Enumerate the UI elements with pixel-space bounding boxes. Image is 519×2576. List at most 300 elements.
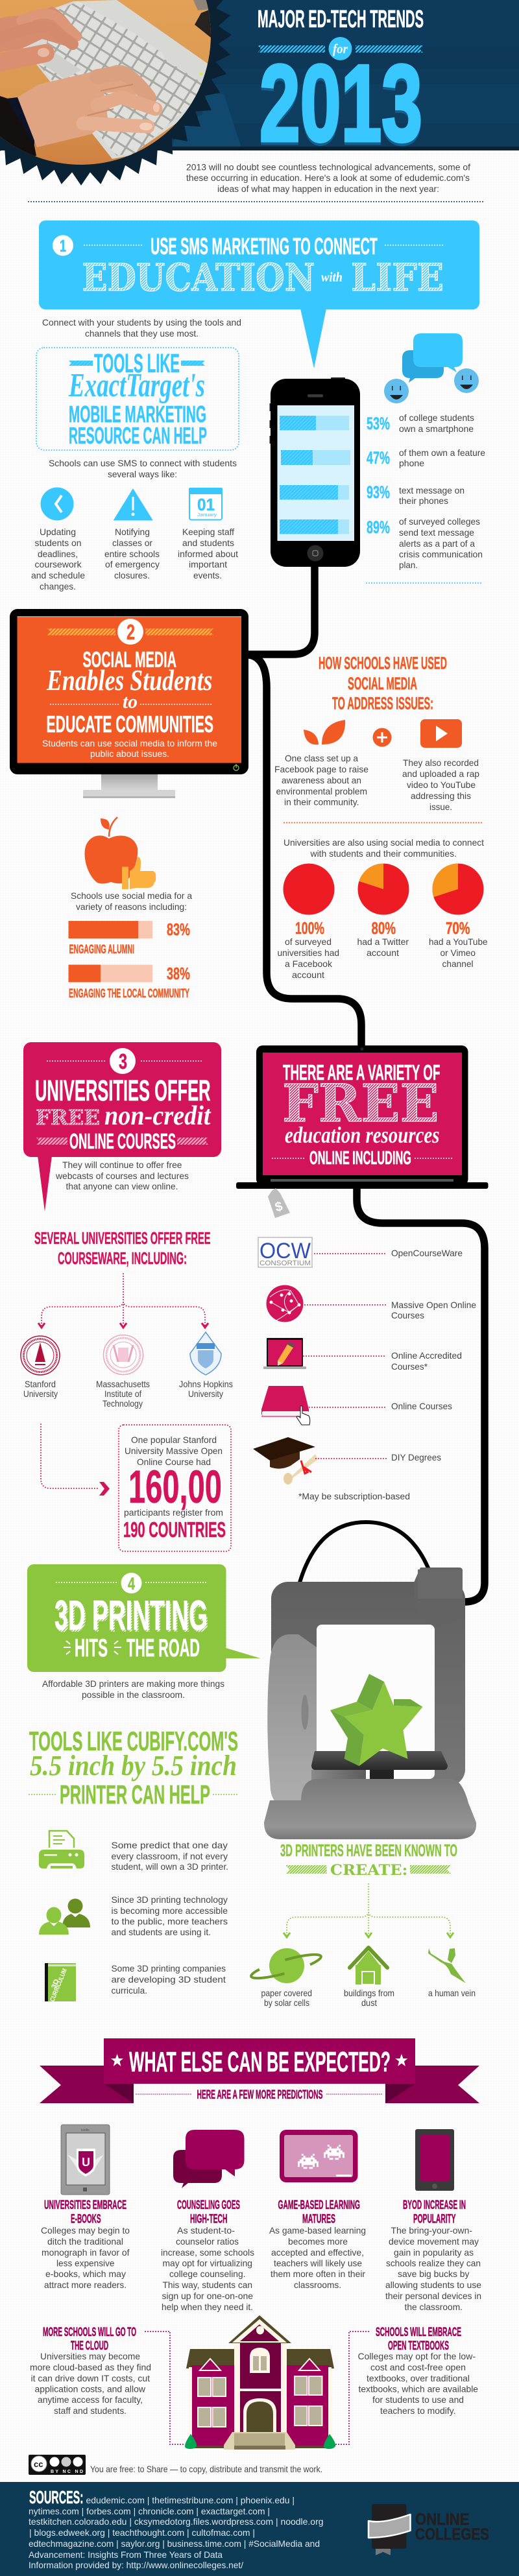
stats: phone usage: send text message	[399, 527, 474, 538]
prediction: e-books: UNIVERSITIES EMBRACE	[44, 2199, 127, 2212]
text: free webcasts: webcasts of courses and lectures	[55, 1171, 189, 1181]
icon: desktop monitor with heading	[10, 609, 248, 798]
icon: laptop with heading: education resources	[285, 1122, 440, 1148]
item: 3D curricula: Some 3D printing companies	[112, 1963, 226, 1974]
pie chart: 80 percent twitter: 80%	[371, 918, 396, 938]
stats: phone usage: 53%	[367, 414, 390, 433]
prediction: open textbooks: Colleges may opt for the low-	[358, 2351, 476, 2361]
panel: trend 2 social media	[10, 609, 488, 1001]
heading: 2013	[260, 42, 422, 167]
panel: trend 3 free online courses	[21, 1042, 488, 1551]
heading: 3D printers create	[280, 1841, 457, 1879]
item: human vein: a human vein	[428, 1988, 476, 1998]
prediction: counseling: help when they need it.	[162, 2302, 253, 2312]
prediction: BYOD: allowing students to use	[385, 2280, 481, 2290]
illustration: 3D printer with star	[264, 1522, 476, 1839]
speech bubble header: 3	[119, 1049, 127, 1073]
prediction: BYOD: the classroom.	[405, 2302, 463, 2312]
heading: 2013: 2013	[260, 42, 422, 164]
prediction: game-based learning: teachers will likely use	[274, 2258, 362, 2269]
text: sources list: nytimes.com | forbes.com | chronicle.com | exacttarget.com |	[29, 2506, 270, 2516]
speech bubble header: HITS	[75, 1634, 108, 1662]
icon: laptop with heading	[236, 1045, 488, 1189]
stats: phone usage: own a smartphone	[399, 423, 474, 434]
heading: how schools used social media: SOCIAL MEDIA	[348, 674, 417, 693]
text: sources list: edudemic.com | thetimestribune.com | phoenix.edu |	[86, 2495, 295, 2505]
icon: desktop monitor with heading: Students can use social media to inform the	[42, 738, 217, 748]
upper hand	[0, 6, 71, 52]
banner heading: HERE ARE A FEW MORE PREDICTIONS	[197, 2088, 323, 2102]
speech bubble header: THE ROAD	[127, 1634, 200, 1662]
icon: two people	[39, 1899, 90, 1935]
heading: how schools used social media: TO ADDRESS ISSUES:	[332, 694, 433, 713]
item: building from dust: dust	[361, 1998, 377, 2008]
pie chart: 70 percent youtube: or Vimeo	[440, 948, 476, 958]
text: universities connect: with students and their communities.	[310, 848, 457, 859]
item: 3D printer in every classroom: student, will own a 3D printer.	[112, 1861, 228, 1872]
prediction: BYOD: The bring-your-own-	[391, 2225, 472, 2236]
license: creative commons: cc	[34, 2459, 43, 2469]
prediction: counseling: COUNSELING GOES	[177, 2199, 240, 2212]
bar: engaging alumni 83 percent: 83%	[167, 920, 190, 939]
icon: desktop monitor with heading: 2	[127, 620, 135, 644]
prediction: open textbooks: for students to use and	[372, 2394, 464, 2405]
prediction: open textbooks: OPEN TEXTBOOKS	[388, 2339, 449, 2353]
icon: laptop and pencil	[263, 1338, 306, 1369]
item: updating students: and schedule	[31, 570, 85, 580]
callout: 160,00 participants	[119, 1425, 231, 1551]
text: sources list: edtechmagazine.com | saylor.org | business.time.com | #SocialMedia and	[29, 2538, 320, 2549]
text: introduction: ideas of what may happen in education in the next year:	[217, 184, 439, 194]
icon: curriculum book	[45, 1963, 76, 2003]
pie chart: 70 percent youtube	[429, 864, 488, 969]
text: facebook page example	[274, 753, 368, 807]
item: solar paper planet: by solar cells	[264, 1998, 309, 2008]
speech bubble header	[39, 221, 479, 368]
item: 3D curricula: are developing 3D student	[112, 1974, 226, 1985]
prediction: game-based learning: As game-based learning	[269, 2225, 366, 2236]
prediction: BYOD: gain in popularity as	[394, 2247, 474, 2258]
prediction: game-based learning	[269, 2130, 366, 2290]
pie chart: 70 percent youtube: had a YouTube	[429, 936, 488, 947]
callout: 160,00 participants: 160,00	[128, 1462, 222, 1513]
pie chart: 100 percent facebook: of surveyed	[285, 936, 332, 947]
speech bubble header: LIFE	[351, 256, 444, 300]
prediction: the cloud: anytime access for faculty,	[38, 2394, 143, 2405]
icon: laptop with heading: FREE	[282, 1073, 439, 1134]
university: MIT: Massachusetts	[96, 1379, 150, 1389]
text: schools use social media: variety of reasons including:	[76, 901, 187, 912]
icon: plus	[372, 728, 392, 747]
item: online courses	[261, 1386, 452, 1425]
icon: laptop with heading: ONLINE INCLUDING	[309, 1148, 411, 1169]
license: creative commons: You are free: to Share — to copy, distribute and transmit the work.	[90, 2464, 322, 2474]
text: free webcasts: They will continue to offer free	[62, 1160, 182, 1170]
text: connect with students: Connect with your students by using the tools and	[42, 317, 241, 328]
pie chart: 80 percent twitter: had a Twitter	[357, 936, 409, 947]
speech bubble header: ONLINE COURSES	[69, 1129, 176, 1153]
text: facebook page example: One class set up a	[285, 753, 358, 763]
pie chart: 100 percent facebook: universities had	[278, 948, 339, 958]
logo: online colleges: COLLEGES	[415, 2525, 489, 2544]
text: schools can use SMS: several ways like:	[108, 469, 177, 479]
prediction: e-books: less expensive	[56, 2258, 115, 2269]
text: sources list: SOURCES:	[29, 2487, 83, 2507]
callout: ExactTarget tools	[36, 348, 239, 450]
stats: phone usage: text message on	[399, 485, 465, 495]
text: facebook page example: awareness about an	[282, 775, 361, 785]
prediction: game-based learning: becomes more	[288, 2236, 348, 2247]
logo: online colleges	[368, 2504, 489, 2555]
university: MIT: Institute of	[104, 1389, 141, 1399]
logo: online colleges: ONLINE	[415, 2510, 470, 2529]
panel: trend 1 SMS marketing	[31, 221, 485, 591]
callout: 160,00 participants: University Massive Open	[125, 1446, 223, 1456]
heading: tools like cubify: 5.5 inch by 5.5 inch	[30, 1750, 237, 1782]
text: rap video example: and uploaded a rap	[402, 769, 479, 779]
item: human vein	[428, 1948, 476, 1998]
bar: engaging local community 38 percent: ENGAGING THE LOCAL COMMUNITY	[69, 987, 189, 1001]
prediction: the cloud	[30, 2326, 151, 2416]
text: sources list: testkitchen.colorado.edu | cksymedotorg.files.wordpress.com | noodle.org	[29, 2516, 323, 2527]
item: solar paper planet	[249, 1948, 323, 2008]
panel: trend 4 3D printing	[27, 1522, 476, 2008]
lower sleeve	[0, 96, 36, 156]
callout: ExactTarget tools: TOOLS LIKE	[94, 348, 180, 378]
prediction: BYOD	[385, 2129, 481, 2312]
prediction: e-books: Colleges may begin to	[41, 2225, 130, 2236]
text: introduction: 2013 will no doubt see countless technological advancements, some of	[186, 162, 470, 173]
icon: calendar: 01	[197, 495, 215, 514]
item: keeping staff informed	[178, 488, 238, 580]
item: updating students: Updating	[40, 527, 76, 537]
prediction: BYOD: schools realize they can	[386, 2258, 481, 2269]
item: 3D printer in every classroom: Some predict that one day	[112, 1840, 228, 1850]
speech bubble header: FREE	[36, 1105, 100, 1130]
icon: kindle	[61, 2125, 110, 2195]
item: DIY degrees	[253, 1437, 441, 1485]
prediction: BYOD: BYOD INCREASE IN	[403, 2199, 466, 2212]
text: rap video example: video to YouTube	[407, 780, 476, 790]
footnote: *May be subscription-based	[298, 1491, 410, 1501]
prediction: counseling: counselor ratios	[176, 2236, 239, 2247]
icon: back chevron	[40, 488, 74, 520]
icon: network globe	[266, 1285, 304, 1322]
item: DIY degrees: DIY Degrees	[391, 1452, 441, 1462]
heading: tools like cubify: PRINTER CAN HELP	[60, 1780, 210, 1809]
item: 3D curricula: curricula.	[112, 1985, 147, 1996]
heading: tools like cubify	[29, 1726, 238, 1809]
item: teachers and students: is becoming more accessible	[112, 1905, 228, 1916]
university: Stanford: University	[23, 1389, 58, 1399]
speech bubble header: non-credit	[104, 1101, 211, 1131]
icon: OCW logo: OCW	[260, 1239, 311, 1263]
prediction: counseling: college counseling.	[169, 2269, 245, 2279]
bar: engaging local community 38 percent: 38%	[167, 964, 190, 983]
item: teachers and students: and students are using it.	[112, 1927, 211, 1937]
item: notifying classes: classes or	[112, 538, 152, 548]
item: online accredited courses: Online Accredited	[391, 1350, 462, 1361]
callout: 160,00 participants: 190 COUNTRIES	[123, 1518, 226, 1542]
prediction: the cloud: more cloud-based as they find	[30, 2362, 151, 2372]
pie chart: 100 percent facebook: account	[292, 970, 324, 980]
item: updating students	[31, 488, 85, 591]
bar: engaging alumni 83 percent	[69, 920, 190, 957]
icon: book and cursor	[261, 1386, 310, 1425]
heading: how schools used social media	[319, 654, 447, 713]
heading: 2013: 2013	[260, 45, 422, 167]
item: 3D printer in every classroom: every classroom, if not every	[112, 1851, 228, 1861]
stats: phone usage: 93%	[367, 483, 390, 502]
icon: desktop monitor with heading: SOCIAL MEDIA	[83, 647, 176, 672]
text: facebook page example: environmental problem	[276, 786, 367, 796]
icon: kindle: U	[82, 2156, 90, 2169]
text: free webcasts	[55, 1160, 189, 1191]
item: massive open online courses	[266, 1285, 476, 1322]
item: keeping staff informed: informed about	[178, 549, 238, 559]
arrow: Stanford to statistic	[41, 1424, 110, 1496]
speech bubble header	[27, 1564, 261, 1672]
text: introduction: these occurring in education. Here's a look at some of edudemic.com's	[186, 173, 470, 183]
panel: footer sources	[0, 2482, 519, 2576]
icon: video play	[420, 719, 462, 748]
icon: curriculum book: 3D	[51, 1978, 60, 1990]
prediction: counseling: This way, students can	[162, 2280, 252, 2290]
university: Stanford	[21, 1336, 60, 1399]
text: rap video example: issue.	[429, 802, 452, 812]
item: OpenCourseWare	[258, 1237, 463, 1267]
icon: kindle: kindle	[81, 2129, 90, 2132]
illustration: school building	[185, 2315, 335, 2450]
text: schools use social media: Schools use social media for a	[71, 890, 192, 901]
icon: mobile device	[415, 2129, 454, 2191]
prediction: game-based learning: accepted and effective,	[271, 2247, 364, 2258]
item: updating students: students on	[35, 538, 82, 548]
pie chart: 80 percent twitter: account	[367, 948, 399, 958]
prediction: open textbooks	[358, 2326, 478, 2416]
license: creative commons	[29, 2455, 322, 2475]
prediction: e-books: ditch the traditional	[47, 2236, 123, 2247]
prediction: the cloud: staff and students.	[54, 2405, 127, 2416]
callout: ExactTarget tools: RESOURCE CAN HELP	[69, 422, 207, 449]
icon: printer	[39, 1831, 84, 1868]
pie chart: 100 percent facebook: 100%	[295, 918, 324, 938]
speech bubble header: 4	[128, 1574, 135, 1593]
prediction: the cloud: MORE SCHOOLS WILL GO TO	[43, 2326, 136, 2339]
prediction: BYOD: POPULARITY	[413, 2213, 456, 2226]
item: teachers and students: to the public, more teachers	[112, 1916, 228, 1926]
text: sources list: Information provided by: http://www.onlinecolleges.net/	[29, 2560, 243, 2570]
text: connect with students: channels that they use most.	[85, 328, 199, 339]
icon: leaves	[304, 720, 345, 745]
callout: ExactTarget tools: MOBILE MARKETING	[69, 401, 206, 427]
speech bubble header: EDUCATION	[82, 256, 315, 300]
icon: desktop monitor with heading: to	[123, 691, 138, 712]
university: MIT	[96, 1335, 150, 1409]
pie chart: 70 percent youtube: channel	[442, 959, 474, 969]
speech bubble header	[23, 1042, 221, 1211]
prediction: e-books: e-books, which may	[45, 2269, 126, 2279]
heading: 3D printers create: CREATE:	[330, 1862, 407, 1879]
prediction: the cloud: application costs, and allow	[35, 2384, 146, 2394]
item: online courses: Online Courses	[391, 1401, 452, 1411]
icon: speech bubbles	[173, 2130, 244, 2188]
lower hand	[18, 65, 148, 147]
text: schools can use SMS	[49, 458, 237, 479]
text: affordable printers: Affordable 3D printers are making more things	[42, 1678, 224, 1689]
prediction: open textbooks: textbooks, over traditional	[367, 2373, 470, 2383]
speech bubble header: UNIVERSITIES OFFER	[35, 1074, 210, 1107]
bar: engaging local community 38 percent	[69, 964, 190, 1001]
stats: phone usage: of college students	[399, 412, 474, 423]
item: updating students: coursework	[35, 559, 82, 569]
item: keeping staff informed: Keeping staff	[182, 527, 234, 537]
stats: phone usage: 89%	[367, 518, 390, 537]
photo: hands on keyboard	[0, 0, 211, 165]
icon: calendar: January	[197, 513, 217, 518]
stats: phone usage: of surveyed colleges	[399, 516, 480, 527]
item: building from dust: buildings from	[344, 1988, 394, 1998]
item: notifying classes: closures.	[114, 570, 150, 580]
icon: curriculum book: CURRICULUM	[49, 1968, 69, 2003]
text: sources list	[29, 2487, 323, 2570]
icon: graduation cap and diploma	[253, 1437, 318, 1485]
item: massive open online courses: Massive Open Online	[391, 1300, 476, 1310]
icon: price tag: $	[274, 1199, 284, 1215]
text: rap video example: addressing this	[411, 791, 471, 801]
text: schools can use SMS: Schools can use SMS to connect with students	[49, 458, 237, 468]
text: affordable printers: possible in the classroom.	[82, 1689, 185, 1700]
item: notifying classes: entire schools	[104, 549, 160, 559]
prediction: counseling: HIGH-TECH	[190, 2213, 227, 2226]
text: facebook page example: in their community.	[284, 796, 359, 807]
text: connect with students	[42, 317, 241, 339]
university: Johns Hopkins	[179, 1332, 233, 1399]
prediction: BYOD: save big bucks by	[398, 2269, 470, 2279]
prediction: game-based learning: them more often in their	[271, 2269, 365, 2279]
ribbon: for	[258, 37, 423, 60]
stats: phone usage: 47%	[367, 448, 390, 468]
icon: tablet with invaders	[280, 2130, 358, 2182]
item: online accredited courses	[263, 1338, 462, 1372]
university: Johns Hopkins: University	[188, 1389, 223, 1399]
item: online accredited courses: Courses*	[391, 1361, 428, 1372]
heading: several universities	[34, 1228, 210, 1268]
item: notifying classes: of emergency	[105, 559, 160, 569]
item: 3D curricula	[45, 1963, 226, 2003]
ribbon: for: for	[333, 41, 348, 56]
heading: tools like cubify: TOOLS LIKE CUBIFY.COM'S	[29, 1726, 238, 1756]
icon: warning triangle	[114, 489, 152, 520]
arrows: university tree	[38, 1274, 208, 1328]
prediction: open textbooks: textbooks, which are available	[358, 2384, 478, 2394]
item: keeping staff informed: events.	[193, 570, 222, 580]
stats: phone usage: crisis communication	[399, 549, 483, 559]
icon: apple with thumbs up	[85, 817, 156, 889]
university: Johns Hopkins: Johns Hopkins	[179, 1379, 233, 1389]
pie chart: 80 percent twitter	[357, 864, 409, 958]
item: 3D printer in every classroom	[39, 1831, 228, 1872]
panel: what else can be expected	[30, 2038, 481, 2450]
prediction: e-books	[41, 2125, 130, 2290]
prediction: e-books: monograph in favor of	[42, 2247, 130, 2258]
icon: smartphone bar chart	[270, 377, 360, 567]
prediction: counseling: increase, some schools	[161, 2247, 254, 2258]
item: solar paper planet: paper covered	[261, 1988, 312, 1998]
callout: 160,00 participants: Online Course had	[137, 1457, 211, 1467]
heading: several universities: COURSEWARE, INCLUDING:	[58, 1248, 187, 1268]
item: notifying classes	[104, 489, 160, 580]
prediction: e-books: attract more readers.	[44, 2280, 127, 2290]
text: affordable printers	[42, 1678, 224, 1700]
prediction: the cloud: THE CLOUD	[71, 2339, 108, 2353]
prediction: open textbooks: teachers to modify.	[380, 2405, 455, 2416]
prediction: game-based learning: MATURES	[302, 2213, 335, 2226]
heading: several universities: SEVERAL UNIVERSITIES OFFER FREE	[34, 1228, 210, 1248]
prediction: counseling: As student-to-	[177, 2225, 235, 2236]
cable: black connector running through the trends	[247, 564, 485, 1602]
text: introduction	[186, 162, 470, 194]
speech bubble header: with	[321, 269, 343, 285]
stats: phone usage: their phones	[399, 495, 448, 506]
text: universities connect: Universities are also using social media to connect	[284, 837, 484, 848]
banner heading	[40, 2038, 479, 2103]
stats: phone usage	[367, 412, 485, 570]
icon: calendar	[189, 488, 223, 520]
prediction: counseling: sign up for one-on-one	[162, 2291, 253, 2301]
prediction: e-books: E-BOOKS	[71, 2213, 101, 2226]
university: MIT: Technology	[103, 1398, 143, 1409]
item: teachers and students: Since 3D printing technology	[112, 1894, 228, 1905]
panel: header	[0, 0, 519, 185]
university: Stanford: Stanford	[25, 1379, 56, 1389]
arrows: create tree	[284, 1884, 453, 1937]
icon: OCW logo: CONSORTIUM	[260, 1259, 311, 1267]
speech bubble header: 3D PRINTING	[56, 1593, 209, 1641]
item: keeping staff informed: and students	[182, 538, 234, 548]
prediction: game-based learning: classrooms.	[294, 2280, 341, 2290]
item: keeping staff informed: important	[189, 559, 227, 569]
pie chart: 70 percent youtube: 70%	[446, 918, 470, 938]
prediction: counseling	[161, 2130, 254, 2312]
icon: desktop monitor with heading: EDUCATE COMMUNITIES	[47, 711, 213, 737]
icon: starburst photo frame	[0, 0, 232, 185]
prediction: open textbooks: cost and cost-free open	[370, 2362, 466, 2372]
icon: price tag	[268, 1188, 290, 1218]
callout: 160,00 participants: One popular Stanford	[131, 1435, 217, 1445]
text: sources list: Advancement: Insights From Three Years of Data	[29, 2549, 223, 2560]
prediction: counseling: may opt for virtualizing	[162, 2258, 252, 2269]
icon: desktop monitor with heading: Enables Students	[46, 663, 212, 697]
prediction: game-based learning: GAME-BASED LEARNING	[278, 2199, 360, 2212]
item: notifying classes: Notifying	[115, 527, 150, 537]
prediction: the cloud: it can drive down IT costs, cut	[31, 2373, 150, 2383]
text: universities connect	[284, 837, 484, 859]
callout: ExactTarget tools: ExactTarget's	[68, 367, 205, 404]
text: sources list: | blogs.edweek.org | teachthought.com | cultofmac.com |	[29, 2527, 255, 2538]
stats: phone usage: phone	[399, 458, 424, 468]
text: free webcasts: that anyone can view online.	[66, 1181, 178, 1191]
prediction: BYOD: device movement may	[389, 2236, 479, 2247]
bar: engaging alumni 83 percent: ENGAGING ALUMNI	[69, 943, 134, 957]
stats: phone usage: plan.	[399, 560, 418, 570]
pie chart: 100 percent facebook	[278, 864, 339, 980]
item: updating students: changes.	[40, 581, 76, 591]
icon: chatting smileys	[384, 333, 479, 403]
callout: 160,00 participants: participants register from	[124, 1507, 223, 1518]
item: updating students: deadlines,	[38, 549, 78, 559]
prediction: the cloud: Universities may become	[40, 2351, 140, 2361]
